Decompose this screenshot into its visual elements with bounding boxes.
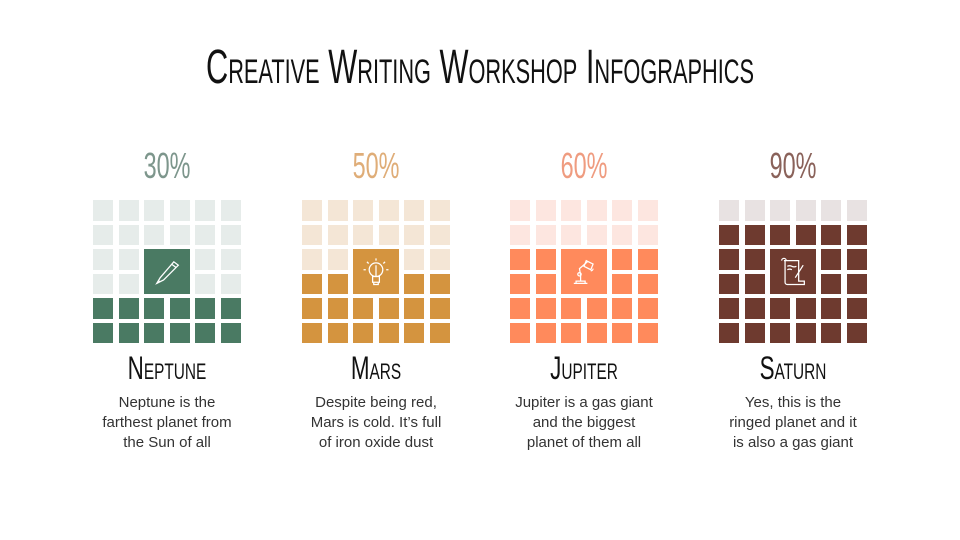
description: neptune: Neptune is the <box>119 394 215 411</box>
description: mars <box>311 394 441 451</box>
description: jupiter <box>515 394 653 451</box>
panel: neptune <box>93 145 241 451</box>
description: neptune <box>102 394 232 451</box>
waffle grid: neptune <box>93 200 241 343</box>
percent: 50%: 50% <box>353 145 399 186</box>
description: jupiter: and the biggest <box>533 414 635 431</box>
description: mars: Mars is cold. It’s full <box>311 414 441 431</box>
description: saturn: ringed planet and it <box>729 414 857 431</box>
panel: saturn <box>719 145 867 451</box>
planet name: mars: Mars <box>351 350 401 386</box>
waffle grid: jupiter <box>510 200 658 343</box>
percent: 90%: 90% <box>770 145 816 186</box>
panel: mars <box>302 145 450 451</box>
planet name: jupiter: Jupiter <box>550 350 618 386</box>
description: mars: Despite being red, <box>315 394 437 411</box>
description: saturn <box>729 394 857 451</box>
planet name: saturn: Saturn <box>760 350 826 386</box>
panel: jupiter <box>510 145 658 451</box>
description: neptune: farthest planet from <box>102 414 232 431</box>
grid cells <box>0 0 960 18</box>
description: jupiter: planet of them all <box>527 434 641 451</box>
waffle grid: mars <box>302 200 450 343</box>
description: neptune: the Sun of all <box>123 434 211 451</box>
waffle grid: saturn <box>719 200 867 343</box>
description: jupiter: Jupiter is a gas giant <box>515 394 653 411</box>
planet name: neptune: Neptune <box>128 350 206 386</box>
description: saturn: is also a gas giant <box>733 434 853 451</box>
description: saturn: Yes, this is the <box>745 394 841 411</box>
description: mars: of iron oxide dust <box>319 434 433 451</box>
percent: 60%: 60% <box>561 145 607 186</box>
title: Creative Writing Workshop Infographics <box>206 41 754 94</box>
percent: 30%: 30% <box>144 145 190 186</box>
